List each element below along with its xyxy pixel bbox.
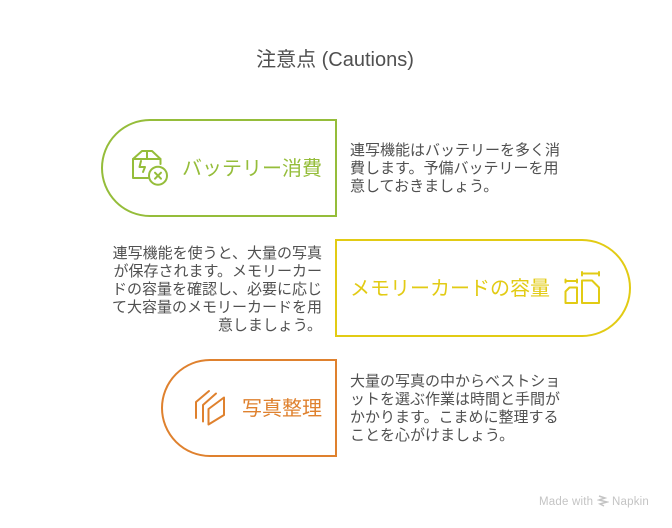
text: photo description: 大量の写真の中からベストショ — [350, 370, 560, 391]
watermark: Made with Napkin: Made with Napkin — [539, 496, 649, 508]
text: battery description: 連写機能はバッテリーを多く消 — [350, 139, 560, 160]
text: memory description: て大容量のメモリーカードを用 — [112, 296, 322, 316]
text: photo description — [350, 370, 560, 445]
text: memory description: ドの容量を確認し、必要に応じ — [112, 278, 322, 298]
text: photo description: ットを選ぶ作業は時間と手間が — [350, 388, 560, 409]
text: battery description: 費します。予備バッテリーを用 — [350, 157, 559, 178]
text: memory description: 連写機能を使うと、大量の写真 — [113, 242, 322, 262]
text: photo description: ことを心がけましょう。 — [350, 424, 514, 445]
label: memory card capacity: メモリーカードの容量 — [350, 272, 550, 301]
label: battery consumption: バッテリー消費 — [182, 152, 322, 181]
label: photo organization: 写真整理 — [242, 392, 322, 421]
title: 注意点 (Cautions) — [256, 49, 414, 71]
text: battery description: 意しておきましょう。 — [350, 175, 498, 196]
text: memory description: が保存されます。メモリーカー — [113, 260, 322, 280]
text: memory description — [112, 242, 322, 334]
text: photo description: かかります。こまめに整理する — [350, 406, 559, 427]
text: battery description — [350, 139, 560, 196]
text: memory description: 意しましょう。 — [218, 314, 322, 334]
